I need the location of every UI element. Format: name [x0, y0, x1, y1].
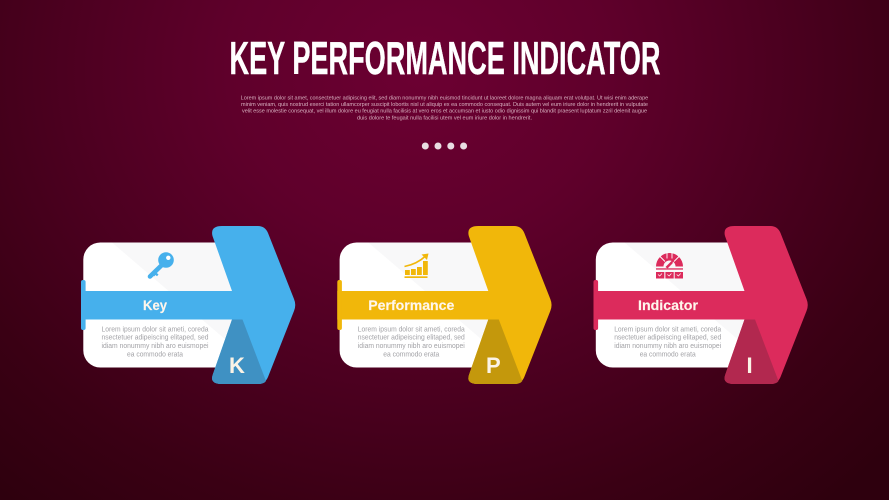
panel: Performance: [337, 226, 552, 384]
label Key: Key: [143, 297, 167, 313]
icon: growth chart: [404, 254, 428, 278]
arrow head: [212, 226, 295, 384]
panel: Indicator: [594, 226, 808, 384]
white card: [340, 242, 496, 368]
label Indicator: Indicator: [638, 297, 699, 313]
card text: nsectetuer adipeiscing elitaped, sed: [614, 335, 721, 342]
letter I: I: [746, 353, 753, 378]
arrow band: [337, 280, 492, 330]
card text: idiam nonummy nibh aro euismopei: [102, 343, 209, 350]
card text: idiam nonummy nibh aro euismopei: [358, 343, 465, 350]
card text: [614, 326, 722, 358]
icon: key: [150, 252, 174, 276]
card text: idiam nonummy nibh aro euismopei: [614, 343, 722, 350]
pagination dots: [422, 142, 467, 150]
arrow head: [725, 226, 808, 384]
letter tab: [468, 320, 522, 384]
label Performance: Performance: [368, 297, 455, 313]
card text: nsectetuer adipeiscing elitaped, sed: [102, 335, 209, 342]
letter tab: [725, 320, 778, 384]
card text: [102, 326, 209, 358]
card text: Lorem ipsum dolor sit ameti, coreda: [102, 326, 209, 334]
letter tab: [212, 320, 266, 384]
intro text block: Lorem ipsum dolor sit amet, consectetuer adipiscing elit, sed diam nonummy nibh euismod tincidunt ut laoreet dolore magna aliquam erat volutpat. Ut wisi enim aderape: [241, 96, 648, 102]
card text: [358, 326, 465, 358]
card text: Lorem ipsum dolor sit ameti, coreda: [614, 326, 721, 334]
card text: ea commodo erata: [127, 351, 183, 358]
card text: Lorem ipsum dolor sit ameti, coreda: [358, 326, 465, 334]
white card: [83, 242, 240, 368]
card text: ea commodo erata: [383, 351, 439, 358]
card text: nsectetuer adipeiscing elitaped, sed: [358, 335, 465, 342]
arrow band: [81, 280, 236, 330]
intro text block: minim veniam, quis nostrud exerci tation ullamcorper suscipit lobortis nisl ut aliquip ex ea commodo consequat. Duis autem vel eum iriure dolor in hendrerit in vulputate: [241, 102, 648, 108]
letter P: P: [486, 353, 501, 378]
intro text block: velit esse molestie consequat, vel illum dolore eu feugiat nulla facilisis at vero eros et accumsan et iusto odio dignissim qui blandit praesent luptatum zzril delenit augue: [242, 109, 647, 115]
intro text block: [241, 96, 648, 121]
panel: Key: [81, 226, 295, 384]
white card: [596, 242, 752, 368]
letter K: K: [229, 353, 245, 378]
arrow band: [594, 280, 748, 330]
arrow head: [468, 226, 552, 384]
intro text block: duis dolore te feugait nulla facilisi utem vel eum iriure dolor in hendrerit.: [357, 115, 532, 121]
card text: ea commodo erata: [640, 351, 696, 358]
icon: gauge: [656, 252, 683, 278]
